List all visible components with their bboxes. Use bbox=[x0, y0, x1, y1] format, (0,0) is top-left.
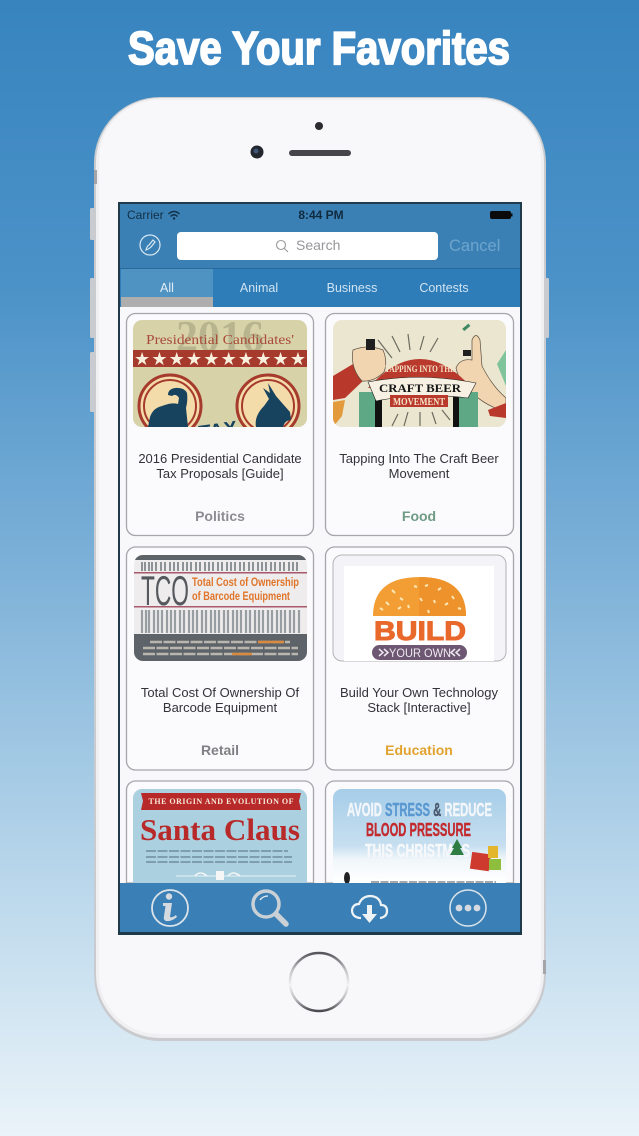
icon: search bbox=[253, 891, 286, 924]
thumbnail: craft beer bbox=[333, 320, 506, 427]
card title: Total Cost Of Ownership Of bbox=[141, 685, 299, 700]
thumbnail: build your own: BUILD bbox=[374, 616, 466, 646]
status bar: 8:44 PM bbox=[298, 208, 344, 222]
card category: Politics bbox=[195, 508, 245, 524]
card: presidential candidates bbox=[126, 312, 314, 536]
thumbnail: presidential candidates bbox=[133, 320, 307, 427]
thumbnail: presidential candidates: Presidential Candidates' bbox=[146, 333, 294, 348]
icon: edit pencil bbox=[140, 235, 160, 255]
thumbnail: avoid stress: AVOID STRESS & REDUCE bbox=[347, 800, 492, 820]
card category: Food bbox=[402, 508, 436, 524]
thumbnail: build your own bbox=[333, 555, 506, 661]
card: presidential candidates: Tax Proposals [Guide] bbox=[156, 466, 284, 481]
app header bbox=[120, 204, 520, 268]
thumbnail: barcode: Total Cost of Ownership bbox=[192, 575, 299, 589]
cancel button: Cancel bbox=[449, 237, 500, 255]
card: avoid stress bbox=[326, 781, 514, 884]
category tabs: Business bbox=[327, 281, 377, 295]
thumbnail: barcode: TCO bbox=[141, 567, 189, 614]
category tabs bbox=[120, 268, 520, 307]
phone screen bbox=[118, 202, 522, 935]
card: santa claus bbox=[126, 781, 314, 883]
sensor dot bbox=[315, 122, 323, 130]
camera bbox=[250, 146, 264, 158]
home button bbox=[290, 953, 348, 1011]
icon: info bbox=[152, 890, 188, 926]
thumbnail: avoid stress: THIS CHRISTMAS bbox=[365, 841, 470, 861]
card category: Retail bbox=[201, 742, 239, 758]
thumbnail: santa claus: THE ORIGIN AND EVOLUTION OF bbox=[148, 797, 294, 806]
icon: more bbox=[450, 890, 486, 926]
card title: Build Your Own Technology bbox=[340, 685, 499, 700]
thumbnail: avoid stress: BLOOD PRESSURE bbox=[366, 820, 471, 840]
card: craft beer: Movement bbox=[389, 466, 450, 481]
search field: Search bbox=[296, 237, 340, 253]
phone body bbox=[90, 97, 549, 1041]
thumbnail: craft beer: MOVEMENT bbox=[393, 397, 445, 408]
speaker bbox=[289, 150, 351, 156]
category tabs: Animal bbox=[240, 281, 278, 295]
thumbnail: build your own: YOUR OWN bbox=[389, 646, 451, 660]
title: Save Your Favorites bbox=[128, 22, 510, 74]
thumbnail: santa claus bbox=[133, 789, 307, 883]
thumbnail: craft beer: CRAFT BEER bbox=[379, 381, 461, 395]
search field bbox=[177, 232, 438, 260]
card title: 2016 Presidential Candidate bbox=[138, 451, 302, 466]
thumbnail: presidential candidates: 2016 bbox=[176, 312, 264, 361]
card: build your own: Stack [Interactive] bbox=[367, 700, 471, 715]
side buttons bbox=[90, 208, 549, 412]
thumbnail: barcode: of Barcode Equipment bbox=[192, 589, 290, 603]
thumbnail: avoid stress bbox=[333, 789, 506, 884]
icon: cloud download bbox=[352, 896, 387, 923]
thumbnail: barcode bbox=[134, 555, 307, 661]
thumbnail: presidential candidates: ★★★★★★★★★★ bbox=[134, 349, 306, 370]
thumbnail: santa claus: Santa Claus bbox=[140, 812, 300, 847]
card: barcode equipment: Barcode Equipment bbox=[163, 700, 277, 715]
category tabs: Contests bbox=[419, 281, 469, 295]
status bar bbox=[127, 208, 512, 222]
thumbnail: craft beer: TAPPING INTO THE bbox=[385, 364, 455, 374]
card: build your own bbox=[326, 547, 514, 770]
status bar: Carrier bbox=[127, 208, 164, 222]
bottom toolbar bbox=[120, 883, 520, 932]
card category: Education bbox=[385, 742, 453, 758]
card: craft beer bbox=[326, 314, 514, 536]
card title: Tapping Into The Craft Beer bbox=[339, 451, 499, 466]
category tabs: All bbox=[160, 281, 174, 295]
thumbnail: presidential candidates: TAX bbox=[198, 417, 239, 445]
card: barcode equipment bbox=[126, 547, 314, 770]
